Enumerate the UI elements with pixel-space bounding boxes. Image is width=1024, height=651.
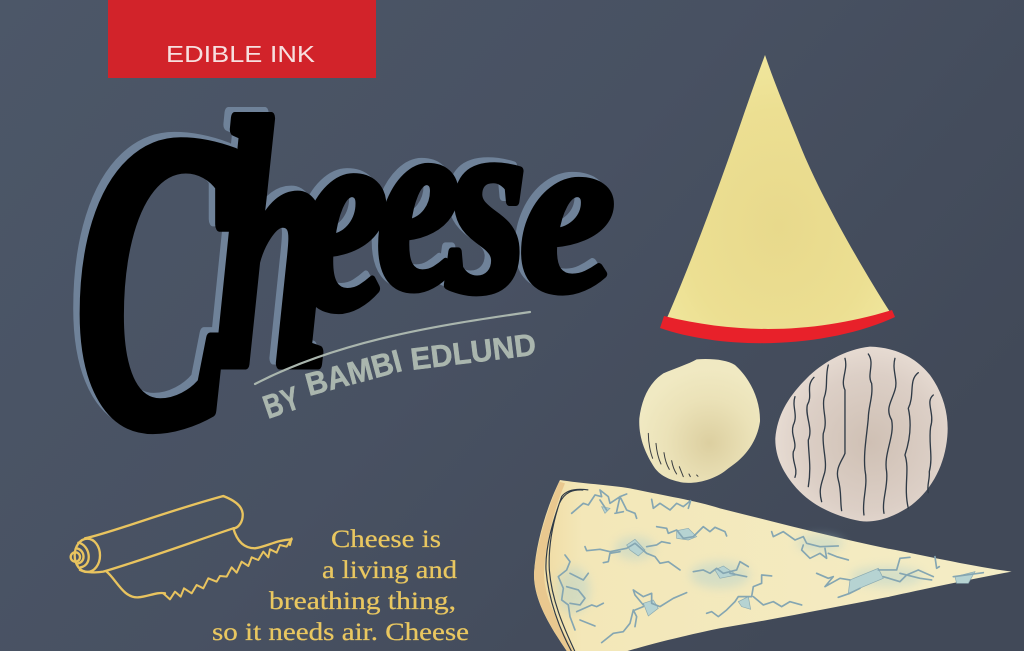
cheese: round veined ball [775, 347, 948, 521]
tab label: EDIBLE INK [166, 41, 316, 67]
title shadow: s [440, 53, 520, 341]
title letters: e [520, 85, 615, 340]
byline: By Bambi Edlund [255, 312, 538, 426]
red rind [660, 310, 895, 343]
mold veins [558, 490, 983, 643]
title lettering: Cheese [69, 44, 615, 514]
header tab: Edible Ink [108, 0, 376, 78]
title shadow [69, 44, 608, 509]
rind lines [546, 489, 588, 651]
title letters: C [76, 49, 238, 514]
icon: roll of cheese paper [71, 496, 292, 599]
cheese: round pale ball [639, 359, 760, 483]
mold patches [602, 507, 975, 616]
wedge rind shading [534, 482, 575, 651]
mold haze [557, 535, 923, 613]
title letters: s [447, 58, 526, 346]
title shadow: e [371, 57, 453, 338]
byline: By Bambi Edlund: BAMBI [301, 343, 405, 403]
intro text: Cheese is [331, 526, 441, 553]
intro text [212, 526, 469, 646]
title letters: e [298, 64, 387, 366]
title letters [76, 49, 615, 514]
intro text: a living and [322, 557, 458, 584]
title shadow: e [292, 59, 381, 361]
ball wavy lines [792, 354, 933, 515]
byline: By Bambi Edlund: EDLUND [409, 327, 538, 377]
title shadow: e [513, 80, 608, 335]
cheese: blue-veined wedge [534, 480, 1012, 651]
intro text: breathing thing, [269, 588, 456, 615]
zigzag cut edge [163, 538, 292, 599]
title shadow: C [69, 44, 231, 509]
intro text: so it needs air. Cheese [212, 619, 469, 646]
byline: By Bambi Edlund: BY [258, 379, 304, 426]
ball hatch marks [648, 433, 698, 477]
cheese: yellow wedge with red rind [660, 55, 895, 343]
byline underline [255, 312, 530, 384]
title shadow: h [209, 44, 324, 435]
title letters: e [377, 62, 459, 343]
title letters: h [215, 49, 330, 440]
